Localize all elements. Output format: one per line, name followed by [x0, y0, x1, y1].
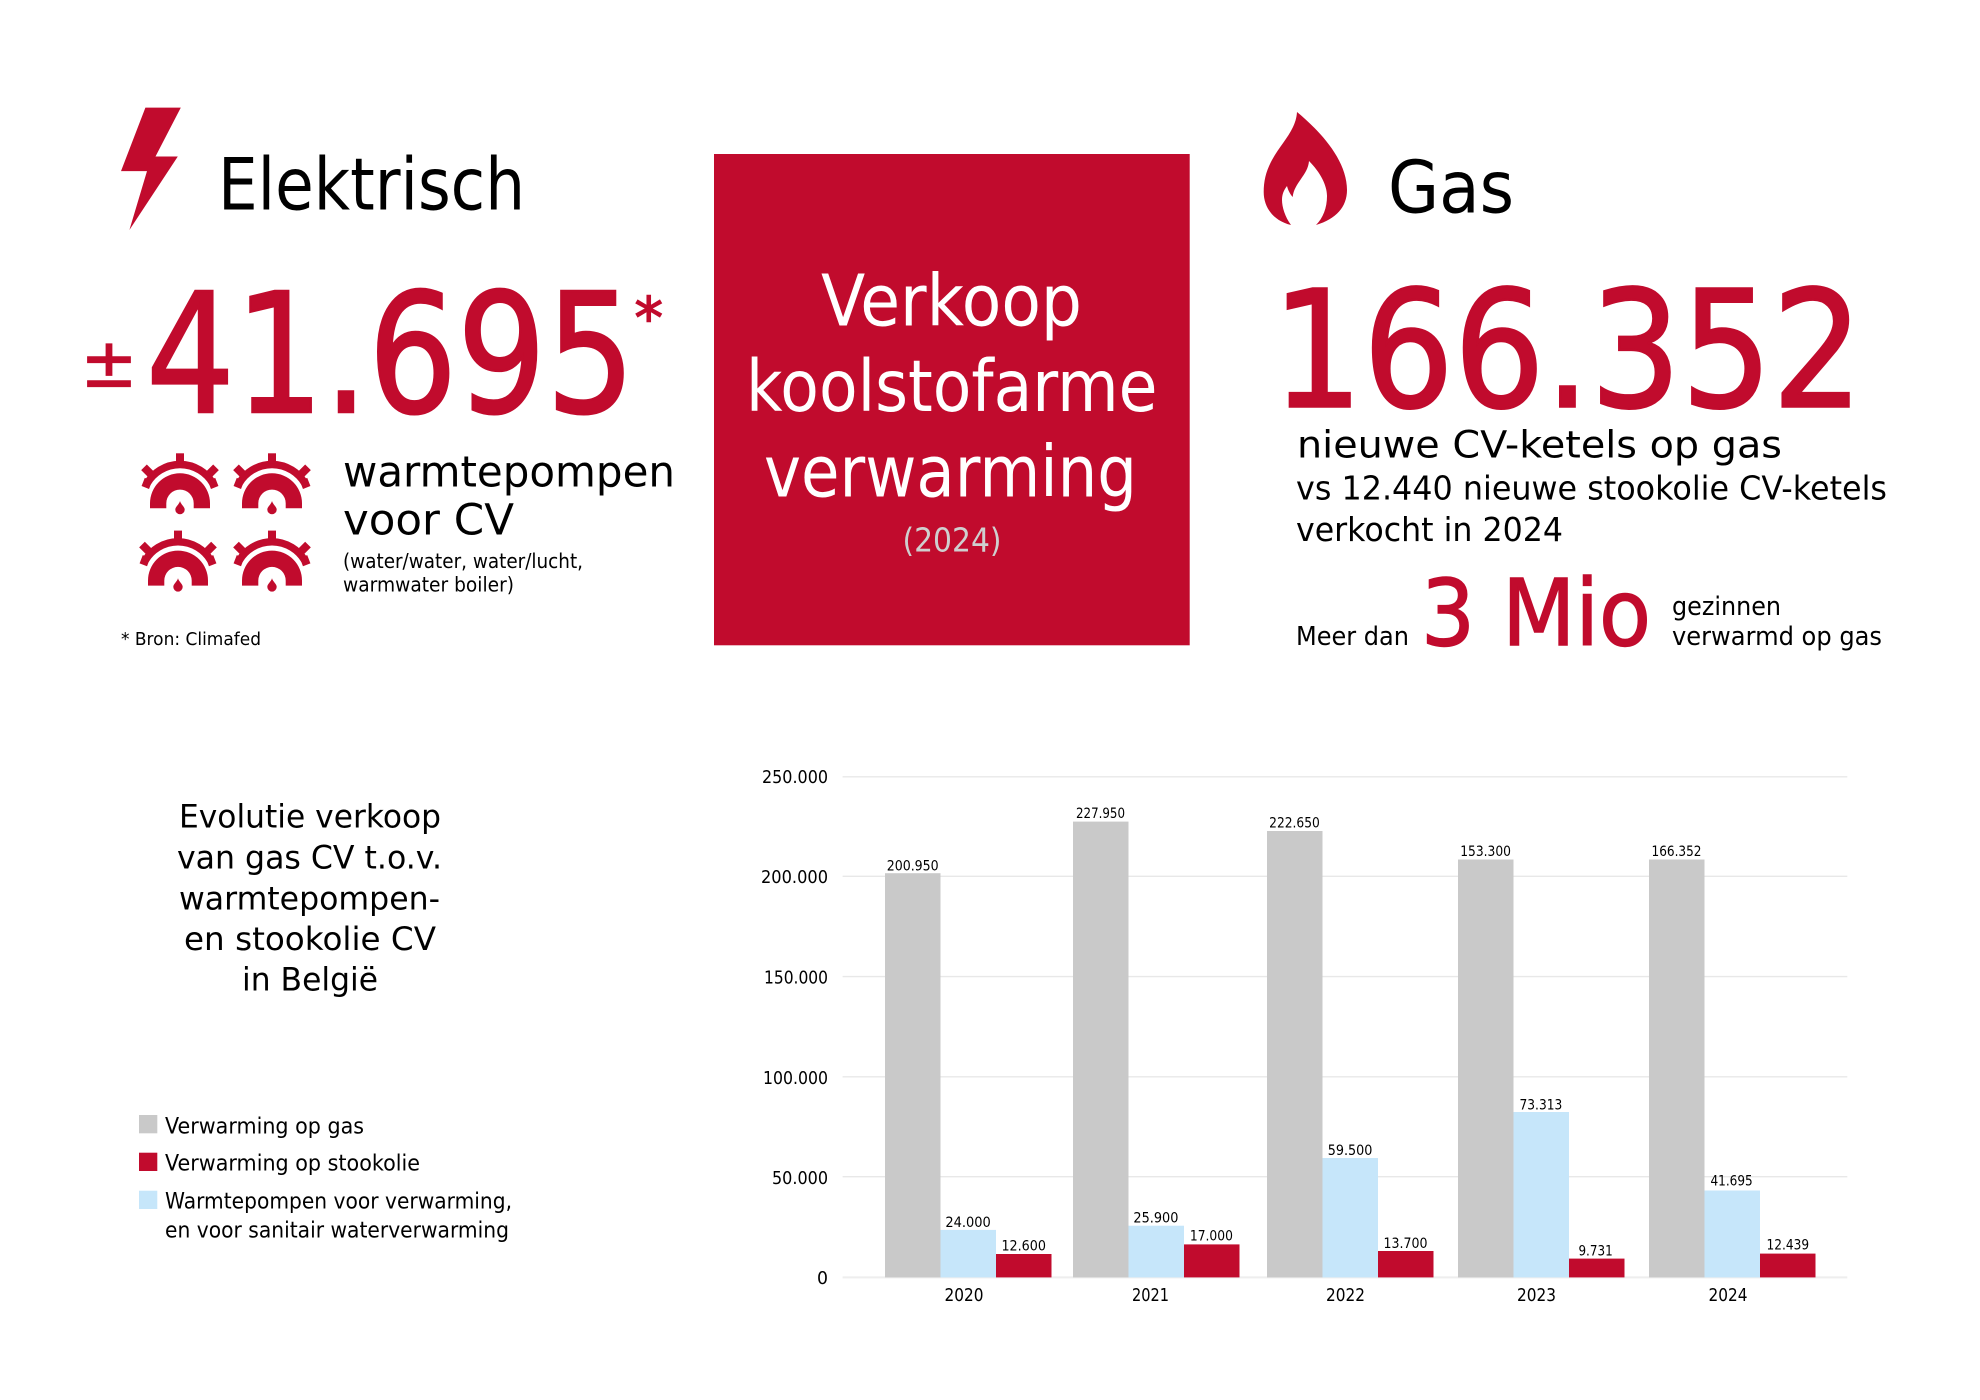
heading: chart title — [177, 798, 442, 999]
big number: 41.695: 41.695 — [146, 259, 635, 452]
data labels: 73.313 — [1520, 1098, 1562, 1114]
icon: lightning bolt — [121, 108, 181, 230]
title: Verkoop — [821, 260, 1082, 343]
data labels: 12.600 — [1001, 1239, 1046, 1255]
bars: gas — [885, 822, 1704, 1277]
y axis labels — [761, 767, 828, 1289]
icon: flame — [1264, 112, 1347, 225]
heading: Gas: Gas — [1388, 146, 1514, 230]
bars: warmtepompen — [940, 1112, 1760, 1277]
x axis labels: 2022 — [1326, 1285, 1365, 1306]
text: gezinnen verwarmd op gas — [1672, 592, 1882, 652]
text: heat pump types — [343, 549, 583, 597]
icon: heat pump 4 — [236, 531, 308, 592]
title — [746, 260, 1158, 514]
data labels — [887, 806, 1809, 1260]
x axis labels: 2021 — [1132, 1285, 1169, 1306]
panel: gas — [1264, 112, 1887, 667]
heading: chart title: Evolutie verkoop — [179, 798, 441, 836]
legend item: gas: Verwarming op gas — [165, 1114, 364, 1139]
data labels: 200.950 — [887, 858, 939, 874]
x axis labels: 2023 — [1517, 1285, 1556, 1306]
y axis labels: 150.000 — [764, 967, 828, 988]
icon: heat pump 3 — [142, 531, 214, 592]
bar chart — [761, 767, 1847, 1306]
heading: chart title: in België — [242, 961, 378, 999]
heading: chart title: warmtepompen- — [179, 879, 440, 917]
text: stookolie comparison: verkocht in 2024 — [1296, 510, 1563, 549]
text: gezinnen verwarmd op gas: gezinnen — [1672, 592, 1781, 622]
text: warmtepompen voor CV — [343, 447, 675, 545]
text: gezinnen verwarmd op gas: verwarmd op gas — [1672, 622, 1882, 652]
text: warmtepompen voor CV: warmtepompen — [343, 447, 675, 497]
y axis labels: 50.000 — [772, 1168, 828, 1189]
source note: * Bron: Climafed — [121, 629, 261, 650]
icon: heat pump 2 — [236, 453, 308, 514]
y axis labels: 200.000 — [761, 867, 828, 888]
text: heat pump types: (water/water, water/lucht, — [343, 549, 583, 573]
data labels: 13.700 — [1384, 1236, 1428, 1252]
icons: four heat pumps — [142, 453, 308, 592]
x axis labels: 2024 — [1708, 1285, 1748, 1306]
y axis labels: 100.000 — [763, 1068, 828, 1089]
data labels: 222.650 — [1269, 815, 1320, 831]
title: koolstofarme — [746, 345, 1158, 428]
big number: 166.352: 166.352 — [1272, 258, 1863, 446]
legend item: warmtepompen: en voor sanitair waterverwarming — [165, 1218, 509, 1243]
data labels: 41.695 — [1710, 1174, 1753, 1190]
text: warmtepompen voor CV: voor CV — [343, 495, 515, 545]
data labels: 227.950 — [1076, 806, 1125, 822]
x axis labels — [944, 1285, 1748, 1306]
x axis labels: 2020 — [944, 1285, 984, 1306]
data labels: 153.300 — [1460, 844, 1511, 860]
year: (2024) — [902, 521, 1002, 560]
heading: chart title: en stookolie CV — [184, 920, 436, 958]
legend — [139, 1114, 512, 1243]
data labels: 9.731 — [1578, 1244, 1613, 1260]
panel: title block — [714, 154, 1190, 645]
legend item: stookolie: Verwarming op stookolie — [165, 1152, 420, 1177]
text: nieuwe CV-ketels op gas: nieuwe CV-ketels op gas — [1297, 423, 1782, 466]
big number: 3 Mio: 3 Mio — [1421, 560, 1651, 667]
legend item: warmtepompen: Warmtepompen voor verwarming, — [165, 1189, 512, 1214]
legend item: warmtepompen — [139, 1189, 512, 1243]
red square — [714, 154, 1190, 645]
title: verwarming — [764, 431, 1137, 514]
text: heat pump types: warmwater boiler) — [343, 573, 514, 597]
plus-minus sign: ± — [80, 324, 137, 404]
text: stookolie comparison: vs 12.440 nieuwe stookolie CV-ketels — [1296, 468, 1887, 508]
data labels: 17.000 — [1190, 1229, 1233, 1245]
icon: heat pump 1 — [144, 453, 216, 514]
text: Meer dan: Meer dan — [1296, 622, 1409, 652]
heading: chart title: van gas CV t.o.v. — [177, 838, 442, 876]
data labels: 59.500 — [1328, 1143, 1372, 1159]
data labels: 25.900 — [1133, 1211, 1178, 1227]
text: stookolie comparison — [1296, 468, 1887, 549]
data labels: 166.352 — [1652, 844, 1702, 860]
panel: elektrisch — [80, 108, 675, 650]
data labels: 24.000 — [945, 1215, 991, 1231]
y axis labels: 250.000 — [762, 767, 828, 788]
y axis labels: 0 — [817, 1268, 828, 1289]
asterisk: * — [634, 286, 663, 352]
data labels: 12.439 — [1766, 1237, 1809, 1253]
heading: Elektrisch: Elektrisch — [218, 142, 525, 226]
bars: stookolie — [996, 1244, 1816, 1277]
